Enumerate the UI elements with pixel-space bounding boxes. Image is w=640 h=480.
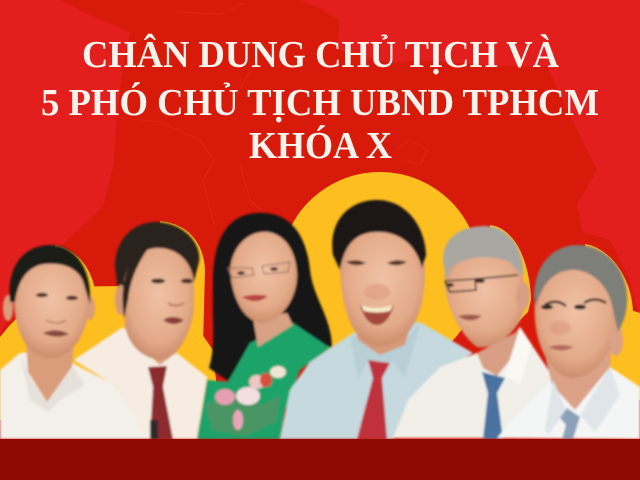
portraits: [0, 200, 640, 439]
title: KHÓA X: [249, 125, 392, 167]
yellow circle behind chairman: [280, 172, 480, 372]
title: CHÂN DUNG CHỦ TỊCH VÀ: [82, 34, 560, 76]
yellow shape left: [0, 286, 220, 420]
title: [41, 34, 599, 167]
title: 5 PHÓ CHỦ TỊCH UBND TPHCM: [41, 82, 599, 124]
portrait: fourth vice chairman: [393, 226, 560, 439]
portrait: second vice chairman: [74, 222, 207, 439]
yellow halo person 6: [585, 244, 633, 340]
portrait: far-left vice chairman: [0, 245, 150, 439]
portrait: chairman: [280, 200, 473, 439]
yellow halo person 5: [490, 225, 531, 340]
embroidered flowers: [205, 366, 286, 436]
yellow shape right: [560, 300, 640, 400]
yellow halo person 1: [55, 245, 96, 300]
portrait: far-right vice chairman: [497, 245, 640, 439]
yellow halo person 2: [160, 221, 205, 345]
portrait: woman vice chairman: [197, 213, 332, 439]
bottom band: [0, 439, 640, 480]
